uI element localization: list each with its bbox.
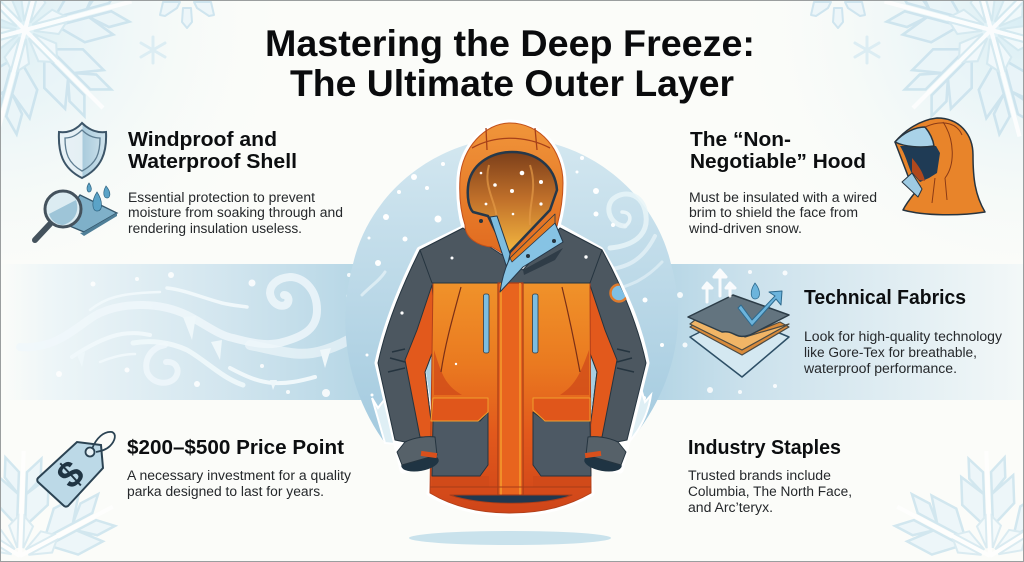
- jacket white halo: [378, 123, 646, 513]
- snowflake: top left: [0, 0, 160, 164]
- body orange panel: [430, 283, 591, 513]
- left sleeve: [378, 250, 437, 442]
- body text: Columbia, The North Face,: [688, 484, 852, 499]
- body text: brim to shield the face from: [689, 205, 858, 220]
- heading: The “Non-: [690, 129, 791, 151]
- wind band: right: [630, 264, 1024, 400]
- body text: [127, 468, 351, 499]
- heading: Industry Staples: [688, 437, 841, 459]
- body text: A necessary investment for a quality: [127, 468, 351, 483]
- snow star: left: [141, 37, 165, 63]
- body text: [803, 329, 1002, 376]
- jacket snow flecks: [400, 255, 588, 365]
- left cuff: [397, 437, 440, 474]
- icon: layered fabric: [688, 270, 789, 377]
- feature: hood: [688, 118, 985, 236]
- icon: price tag: [37, 432, 115, 507]
- body text: like Gore-Tex for breathable,: [804, 345, 977, 360]
- snowflake: bottom right: [882, 447, 1024, 562]
- right sleeve: [585, 250, 646, 442]
- left pocket: [431, 398, 488, 476]
- snowflake: top right: [856, 0, 1024, 164]
- snow star: right: [855, 37, 879, 63]
- seams: [441, 287, 580, 372]
- armpit gaps: [426, 345, 597, 412]
- body text: moisture from soaking through and: [128, 205, 343, 220]
- hood opening: [468, 152, 557, 257]
- body text: and Arc’teryx.: [688, 500, 773, 515]
- heading: Negotiable” Hood: [690, 151, 866, 173]
- feature: price point: [37, 432, 351, 507]
- icon: price tag: $: [49, 452, 92, 496]
- hem: [430, 487, 591, 503]
- collar: right flap: [500, 214, 563, 292]
- icon: hood: [895, 118, 985, 215]
- body text: parka designed to last for years.: [127, 484, 324, 499]
- icon: shield: [59, 123, 106, 178]
- sleeve patch: [610, 284, 628, 302]
- right pocket: [533, 398, 591, 476]
- body text: [688, 190, 877, 236]
- title: Mastering the Deep Freeze:: [265, 23, 755, 64]
- title: The Ultimate Outer Layer: [290, 63, 734, 104]
- body text: Trusted brands include: [688, 468, 831, 483]
- heading: [128, 129, 297, 173]
- icon: magnifier over fabric: [35, 183, 117, 240]
- body text: Look for high-quality technology: [804, 329, 1002, 344]
- wind band: left: [0, 264, 400, 400]
- center placket: [498, 283, 523, 495]
- body text: [128, 190, 343, 236]
- heading: Waterproof Shell: [128, 151, 297, 173]
- feature: industry staples: [688, 437, 852, 515]
- right cuff: [583, 437, 626, 474]
- title: [265, 23, 755, 104]
- grey yoke: [420, 228, 602, 283]
- jacket ground shadow: [409, 531, 611, 545]
- body text: [688, 468, 852, 515]
- body text: waterproof performance.: [803, 361, 957, 376]
- hood: [460, 123, 563, 262]
- heading: Windproof and: [128, 129, 277, 151]
- body text: rendering insulation useless.: [128, 221, 302, 236]
- right zip: [532, 294, 538, 353]
- lower body shading: [432, 350, 590, 487]
- body text: Essential protection to prevent: [128, 190, 315, 205]
- feature: windproof and waterproof shell: [35, 123, 343, 240]
- jacket illustration: [378, 123, 646, 513]
- collar: left strip: [490, 216, 510, 268]
- body text: Must be insulated with a wired: [689, 190, 877, 205]
- left zip: [484, 294, 489, 353]
- heading: $200–$500 Price Point: [127, 437, 344, 459]
- heading: Technical Fabrics: [804, 287, 966, 309]
- snowflake: small top right: [811, 2, 865, 28]
- body text: wind-driven snow.: [688, 221, 802, 236]
- backdrop circle with snow and ice: [345, 138, 678, 445]
- snowflake: bottom left: [0, 447, 128, 562]
- snowflake: small top left: [160, 2, 214, 28]
- heading: [690, 129, 866, 173]
- feature: technical fabrics: [688, 270, 1002, 377]
